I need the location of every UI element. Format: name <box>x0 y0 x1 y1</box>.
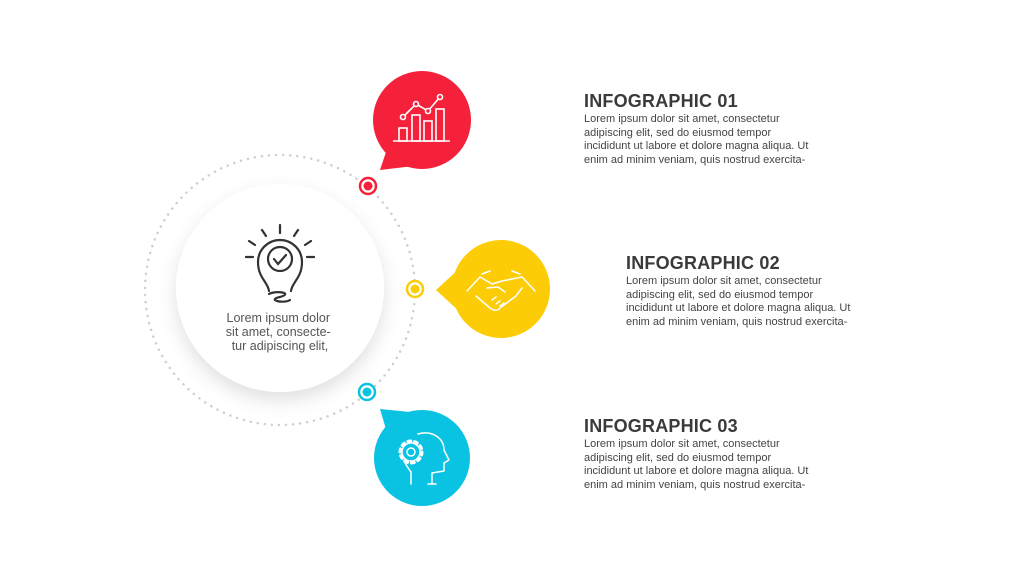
text block 03: adipiscing elit, sed do eiusmod tempor <box>584 452 771 464</box>
text block 03: INFOGRAPHIC 03 <box>584 416 738 436</box>
text block 03: Lorem ipsum dolor sit amet, consectetur <box>584 438 780 450</box>
text block 01: adipiscing elit, sed do eiusmod tempor <box>584 127 771 139</box>
bubble 3 cyan <box>374 409 470 506</box>
icon: light bulb <box>246 225 314 302</box>
text block 02: INFOGRAPHIC 02 <box>626 253 780 273</box>
text block 01: Lorem ipsum dolor sit amet, consectetur <box>584 113 780 125</box>
dotted ring <box>145 155 415 425</box>
center text: tur adipiscing elit, <box>232 339 328 353</box>
icon: handshake <box>467 271 535 310</box>
center text: sit amet, consecte- <box>226 325 331 339</box>
bubble 2 yellow <box>436 240 550 338</box>
bubble 1 red <box>373 71 471 170</box>
text block 02: enim ad minim veniam, quis nostrud exercita- <box>626 316 847 328</box>
text block 02 <box>626 253 850 328</box>
center text: Lorem ipsum dolor <box>226 311 330 325</box>
icon: head with gear <box>400 433 449 484</box>
dot red <box>360 178 376 194</box>
text block 02: incididunt ut labore et dolore magna aliqua. Ut <box>626 302 850 314</box>
dot yellow <box>407 281 423 297</box>
icon: bar chart <box>393 94 450 141</box>
text block 01: incididunt ut labore et dolore magna aliqua. Ut <box>584 140 808 152</box>
text block 03 <box>584 416 808 491</box>
text block 01: INFOGRAPHIC 01 <box>584 91 738 111</box>
text block 01: enim ad minim veniam, quis nostrud exercita- <box>584 154 805 166</box>
text block 01 <box>584 91 808 166</box>
text block 03: incididunt ut labore et dolore magna aliqua. Ut <box>584 465 808 477</box>
center circle <box>176 184 384 392</box>
text block 02: adipiscing elit, sed do eiusmod tempor <box>626 289 813 301</box>
text block 03: enim ad minim veniam, quis nostrud exercita- <box>584 479 805 491</box>
dot cyan <box>359 384 375 400</box>
text block 02: Lorem ipsum dolor sit amet, consectetur <box>626 275 822 287</box>
